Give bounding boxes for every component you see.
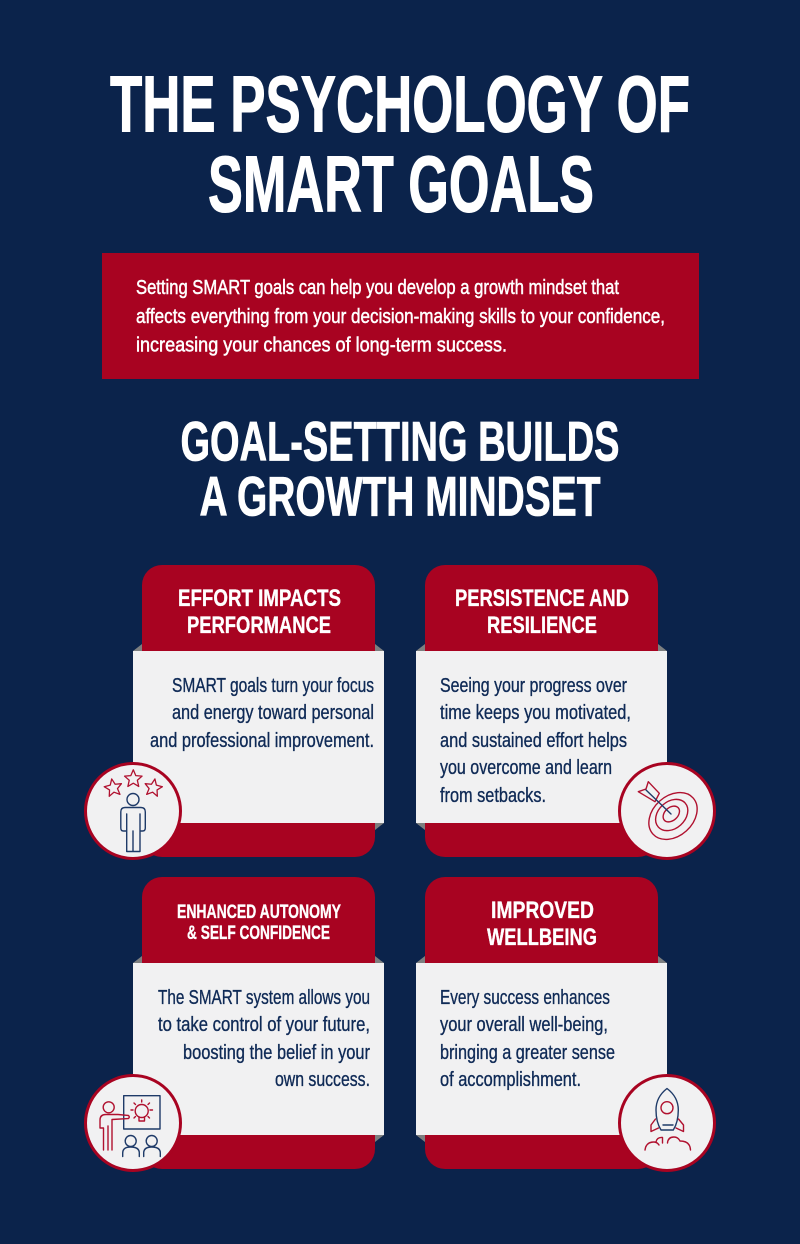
text: persistence and resilience xyxy=(440,675,631,807)
text: persistence and resilience: you overcome and learn xyxy=(440,757,612,779)
heading: improved wellbeing: WELLBEING xyxy=(487,924,597,951)
text: effort impacts performance: and professional improvement. xyxy=(150,730,374,752)
text: persistence and resilience: Seeing your progress over xyxy=(440,675,627,697)
icon: target with arrow xyxy=(620,764,714,858)
text: persistence and resilience: from setbacks. xyxy=(440,785,546,807)
text: effort impacts performance: and energy toward personal xyxy=(172,702,374,724)
intro banner xyxy=(102,253,699,379)
heading: persistence and resilience: RESILIENCE xyxy=(487,612,597,639)
heading: effort impacts performance xyxy=(178,585,341,639)
text: enhanced autonomy: own success. xyxy=(275,1069,370,1091)
text: enhanced autonomy: The SMART system allows you xyxy=(158,987,370,1009)
text: enhanced autonomy: to take control of your future, xyxy=(158,1014,370,1036)
heading: improved wellbeing xyxy=(487,897,597,951)
section heading: A GROWTH MINDSET xyxy=(200,464,600,528)
icon: presenter with board and audience xyxy=(86,1076,180,1170)
heading: enhanced autonomy and self confidence xyxy=(177,902,341,944)
title xyxy=(110,60,690,228)
heading: improved wellbeing: IMPROVED xyxy=(491,897,594,924)
title: SMART GOALS xyxy=(208,140,594,228)
heading: effort impacts performance: EFFORT IMPACTS xyxy=(178,585,341,612)
text: effort impacts performance xyxy=(150,675,374,752)
icon: rocket xyxy=(620,1076,714,1170)
panel: persistence and resilience xyxy=(416,565,714,858)
text: improved wellbeing: Every success enhances xyxy=(440,987,610,1009)
text: improved wellbeing xyxy=(440,987,615,1091)
text: persistence and resilience: and sustained effort helps xyxy=(440,730,627,752)
heading: enhanced autonomy and self confidence: & SELF CONFIDENCE xyxy=(187,923,330,944)
panel: enhanced autonomy and self confidence xyxy=(86,877,384,1170)
text: effort impacts performance: SMART goals turn your focus xyxy=(172,675,374,697)
panel: effort impacts performance xyxy=(86,565,384,858)
intro banner: Setting SMART goals can help you develop a growth mindset that xyxy=(136,276,619,299)
heading: persistence and resilience xyxy=(455,585,629,639)
text: persistence and resilience: time keeps you motivated, xyxy=(440,702,631,724)
intro banner: affects everything from your decision-making skills to your confidence, xyxy=(136,305,665,328)
text: enhanced autonomy: boosting the belief in your xyxy=(183,1042,370,1064)
heading: persistence and resilience: PERSISTENCE AND xyxy=(455,585,629,612)
text: improved wellbeing: bringing a greater sense xyxy=(440,1042,615,1064)
icon: person with stars xyxy=(86,764,180,858)
text: improved wellbeing: your overall well-being, xyxy=(440,1014,608,1036)
heading: effort impacts performance: PERFORMANCE xyxy=(187,612,331,639)
text: enhanced autonomy xyxy=(158,987,370,1091)
panel: improved wellbeing xyxy=(416,877,714,1170)
intro banner: increasing your chances of long-term success. xyxy=(136,334,507,356)
section heading xyxy=(180,410,620,528)
heading: enhanced autonomy and self confidence: ENHANCED AUTONOMY xyxy=(177,902,341,923)
text: improved wellbeing: of accomplishment. xyxy=(440,1069,581,1091)
